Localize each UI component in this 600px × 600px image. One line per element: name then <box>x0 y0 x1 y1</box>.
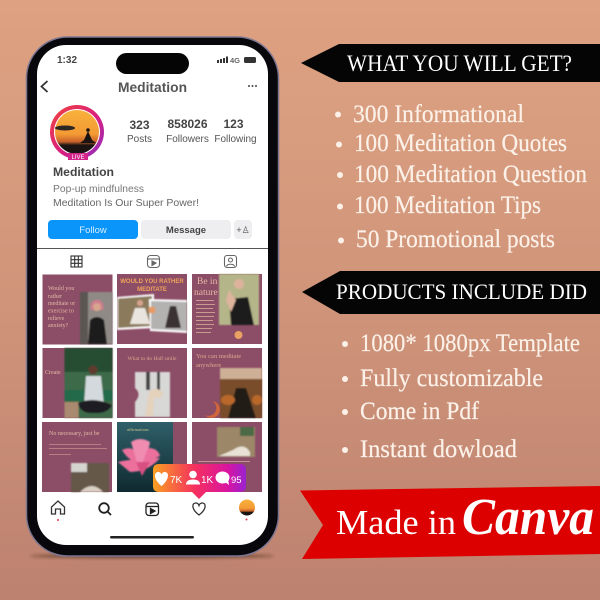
banner: what you will get <box>301 44 600 82</box>
dynamic island <box>116 53 189 74</box>
list: what you will get <box>335 101 587 253</box>
phone shadow <box>30 554 274 558</box>
post 1: relieve <box>48 316 65 322</box>
list items: 300 Informational <box>353 101 524 128</box>
list items: 100 Meditation Tips <box>354 192 541 219</box>
tab icon: reels <box>148 256 160 268</box>
tab icon: grid <box>71 256 82 267</box>
list items: Fully customizable <box>360 365 543 392</box>
home indicator <box>110 536 194 538</box>
status bar icons: 4G <box>230 56 240 65</box>
status bar time: 1:32 <box>57 55 77 66</box>
post grid <box>42 274 262 492</box>
post 4: Create <box>45 370 61 376</box>
bio: Meditation Is Our Super Power! <box>53 198 199 209</box>
post 1: anxiety? <box>48 323 69 329</box>
followers: 1K <box>201 475 214 486</box>
post 2: WOULD YOU RATHER <box>120 279 184 285</box>
list items: Come in Pdf <box>360 398 480 425</box>
post 5: What to do Half smile <box>128 355 177 362</box>
avatar with story ring: LIVE <box>71 155 85 161</box>
bottom nav: profile avatar <box>239 500 255 516</box>
list items: 50 Promotional posts <box>356 226 555 253</box>
post 6 <box>192 348 262 418</box>
post 3: nature <box>194 288 218 298</box>
post 7: No necessary, just be <box>49 431 100 437</box>
bio: Meditation <box>53 167 114 179</box>
tab icon: tagged <box>224 256 236 268</box>
profile stats: Posts <box>127 134 152 145</box>
message button <box>141 220 231 239</box>
avatar with story ring <box>50 105 104 161</box>
notification bubble <box>153 464 246 499</box>
post 1: meditate or <box>48 301 75 307</box>
phone mockup <box>26 37 278 558</box>
add friend button <box>234 220 252 239</box>
bullets <box>335 112 344 244</box>
profile stats: 123 <box>223 117 244 131</box>
bottom nav: heart <box>193 503 205 515</box>
red ribbon: made in canva: Made in <box>336 503 456 542</box>
list items: Instant dowload <box>360 436 517 463</box>
phone body <box>26 37 278 556</box>
post 7 <box>42 422 112 492</box>
banner: what you will get: WHAT YOU WILL GET? <box>347 51 572 76</box>
list items: 100 Meditation Question <box>354 161 587 188</box>
profile stats: Followers <box>166 134 209 145</box>
message button: Message <box>166 225 206 236</box>
post 5 <box>117 348 187 418</box>
profile stats: 323 <box>129 118 150 132</box>
bullets <box>342 341 348 453</box>
post 4 <box>42 348 112 418</box>
nav notification dots <box>57 518 248 521</box>
live badge <box>68 153 88 160</box>
post 1 <box>42 274 112 344</box>
status bar icons <box>217 56 256 65</box>
profile stats <box>127 117 257 145</box>
profile title: Meditation <box>118 80 187 95</box>
add friend button: +♙ <box>236 225 250 235</box>
bottom nav: search <box>99 503 111 515</box>
post 8: affirmations <box>127 427 149 432</box>
bottom nav: home <box>52 501 64 514</box>
list items <box>353 101 587 253</box>
post 2: MEDITATE <box>137 287 167 293</box>
post 1: Would you <box>48 286 74 292</box>
post 1: rather <box>48 294 62 300</box>
post 1: exercise to <box>48 308 74 314</box>
bio <box>53 167 199 209</box>
profile stats: 858026 <box>167 117 208 131</box>
post 8 <box>117 422 187 492</box>
red ribbon: made in canva <box>300 486 600 559</box>
list: products include <box>342 330 580 463</box>
list items <box>360 330 580 463</box>
list items: 100 Meditation Quotes <box>354 130 567 157</box>
menu dots <box>248 85 257 87</box>
banner: products include <box>302 271 600 314</box>
banner: products include: PRODUCTS INCLUDE DID <box>336 279 587 304</box>
phone screen <box>37 45 268 545</box>
post 6: You can meditate <box>196 353 241 360</box>
bottom nav: reels <box>146 503 158 516</box>
follow button: Follow <box>79 225 107 236</box>
profile stats: Following <box>214 134 257 145</box>
post 6: anywhere <box>196 362 221 369</box>
post 3 <box>192 274 262 344</box>
red ribbon: made in canva: Canva <box>462 489 594 546</box>
post 3: Be in <box>197 277 218 287</box>
bio: Pop-up mindfulness <box>53 184 144 195</box>
comments: 95 <box>231 475 242 486</box>
follow button <box>48 220 138 239</box>
post 9 <box>192 422 262 492</box>
post 2 <box>117 274 187 344</box>
likes: 7K <box>170 475 183 486</box>
list items: 1080* 1080px Template <box>360 330 580 357</box>
back chevron <box>42 81 48 92</box>
